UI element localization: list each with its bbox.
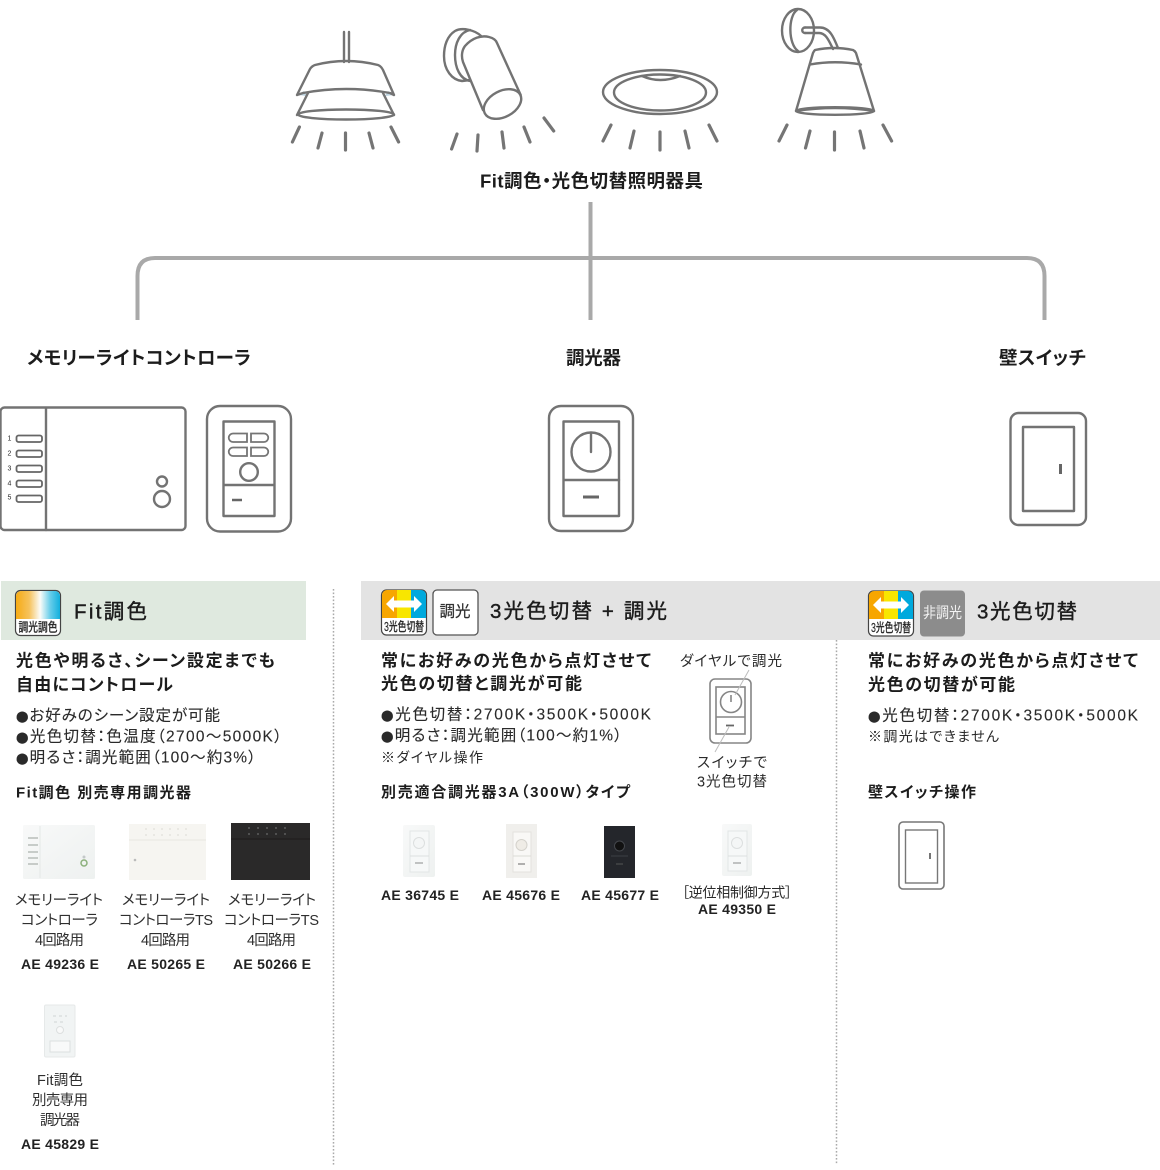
heading: wall switch operation: 壁スイッチ操作 [868, 783, 976, 801]
icon: pendant lamp [292, 32, 399, 150]
column dividers [334, 589, 836, 1165]
panel: Fit band [1, 581, 306, 640]
callout: dimmer operation: ダイヤルで調光 [680, 653, 782, 670]
product: AE 50266 E: AE 50266 E [233, 956, 311, 972]
icon: dimmer [549, 406, 633, 531]
heading: 3-colour: 3光色切替 [977, 600, 1077, 624]
product: AE 45829 E: 別売専用 [32, 1092, 88, 1109]
product: AE 45677 E: AE 45677 E [581, 887, 659, 903]
product: AE 45676 E: AE 45676 E [482, 887, 560, 903]
text block: 3-colour description: 光色の切替が可能 [868, 674, 1015, 694]
product: AE 50265 E: コントローラTS [119, 913, 213, 929]
product: AE 50266 E: メモリーライト [228, 893, 316, 909]
text block: Fit description: 光色や明るさ、シーン設定までも [16, 650, 275, 670]
text block: Fit description: ●明るさ：調光範囲（100～約3%） [16, 748, 256, 768]
icon: dimming badge: 調光 [440, 602, 470, 620]
product: AE 49236 E: 4回路用 [35, 932, 84, 949]
text block: 3-colour description [868, 650, 1139, 744]
product: AE 49236 E [15, 825, 103, 972]
icon: 3-colour badge [382, 590, 426, 635]
icon: non-dimming badge [920, 590, 965, 636]
product: AE 36745 E [381, 825, 459, 903]
product: AE 50266 E [224, 823, 319, 972]
product: AE 49350 E: ［逆位相制御方式］ [682, 884, 792, 900]
heading: compatible dimmers: 別売適合調光器3A（300W）タイプ [381, 783, 631, 801]
product: AE 45829 E: 調光器 [40, 1112, 80, 1129]
product: AE 50266 E: 4回路用 [247, 932, 296, 949]
text block: 3-colour and dimming description: 常にお好みの光色から点灯させて [381, 650, 651, 670]
icon: spot light [444, 29, 554, 151]
callout: dimmer operation [680, 653, 782, 790]
icon: small wall switch [899, 822, 944, 889]
callout: dimmer operation: スイッチで [697, 756, 767, 772]
heading: Fit: Fit調色 [74, 600, 147, 624]
icon: dimming badge [433, 590, 478, 635]
tree connector [138, 202, 1044, 320]
icon: wall bracket lamp [779, 9, 892, 150]
icon: non-dimming badge: 非調光 [923, 604, 962, 622]
heading: dimmer: 調光器 [566, 348, 621, 368]
product: AE 49350 E: AE 49350 E [698, 901, 776, 917]
heading: Fit dimmers: Fit調色 別売専用調光器 [16, 784, 191, 802]
heading: wall switch: 壁スイッチ [999, 348, 1086, 368]
text block: Fit description [16, 650, 282, 768]
text block: Fit description: ●光色切替：色温度（2700～5000K） [16, 728, 282, 746]
product: AE 45677 E [581, 826, 659, 903]
text block: 3-colour description: ※調光はできません [868, 728, 1000, 744]
icon: memory light controller unit: 5 [8, 494, 12, 502]
icon: memory light controller unit: 2 [8, 450, 12, 458]
icon: memory light controller unit: 1 [8, 436, 12, 442]
icon: 3-colour badge: 3光色切替 [384, 619, 424, 634]
heading: memory light controller: メモリーライトコントローラ [27, 348, 251, 368]
icon: 3-colour badge right [868, 591, 914, 636]
icon: memory light controller unit [0, 408, 186, 530]
product: AE 50265 E: メモリーライト [122, 893, 210, 909]
icon: memory light wall panel [207, 406, 291, 532]
text block: 3-colour description: 常にお好みの光色から点灯させて [868, 650, 1138, 670]
product: AE 45829 E: AE 45829 E [21, 1136, 99, 1152]
product: AE 50265 E: 4回路用 [141, 932, 190, 949]
callout: dimmer operation: 3光色切替 [697, 774, 767, 790]
product: AE 45829 E: Fit調色 [37, 1072, 83, 1089]
text block: 3-colour and dimming description: ●光色切替：2700K・3500K・5000K [381, 706, 652, 724]
product: AE 50265 E [119, 824, 213, 972]
heading: 3-colour and dimming: 3光色切替 + 調光 [490, 600, 667, 623]
product: AE 49236 E: メモリーライト [15, 893, 103, 909]
icon: 3-colour badge right: 3光色切替 [871, 620, 911, 635]
text block: 3-colour and dimming description: 光色の切替と調光が可能 [381, 674, 582, 694]
text block: 3-colour and dimming description [381, 650, 652, 766]
product: AE 50265 E: AE 50265 E [127, 956, 205, 972]
icon: Fit badge [16, 590, 60, 636]
icon: memory light controller unit: 4 [8, 480, 12, 488]
icon: wall switch [1010, 413, 1086, 525]
product: AE 45829 E [21, 1005, 99, 1152]
text block: Fit description: 自由にコントロール [16, 674, 173, 694]
text block: 3-colour description: ●光色切替：2700K・3500K・5000K [868, 706, 1139, 726]
product: AE 50266 E: コントローラTS [224, 913, 319, 929]
text block: Fit description: ●お好みのシーン設定が可能 [16, 706, 220, 726]
product: AE 49350 E [682, 824, 792, 917]
panel: 3-colour and dimming band [361, 581, 1160, 640]
icon: Fit badge: 調光調色 [18, 620, 58, 634]
product: AE 45676 E [482, 824, 560, 903]
product: AE 49236 E: コントローラ [21, 913, 98, 929]
product: AE 36745 E: AE 36745 E [381, 887, 459, 903]
icon: memory light controller unit: 3 [8, 466, 12, 472]
icon: downlight [603, 70, 717, 150]
text block: 3-colour and dimming description: ※ダイヤル操作 [381, 750, 483, 766]
product: AE 49236 E: AE 49236 E [21, 956, 99, 972]
title: Fit調色・光色切替照明器具 [480, 170, 703, 192]
text block: 3-colour and dimming description: ●明るさ：調光範囲（100～約1%） [381, 726, 622, 746]
